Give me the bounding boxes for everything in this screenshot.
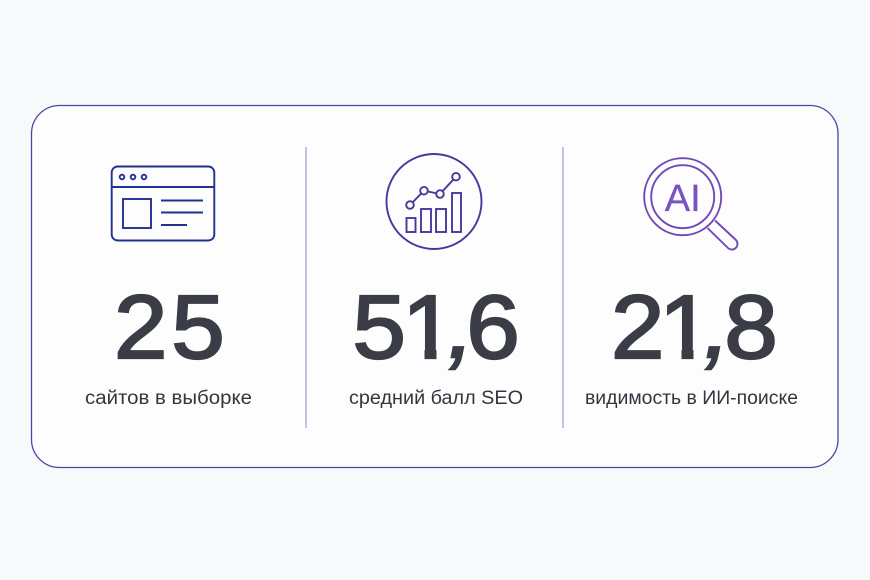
stat: SEO score number: 6 (466, 277, 520, 377)
label: sites: сайтов в выборке (85, 388, 252, 409)
icon: AI magnifier: AI (665, 178, 701, 220)
stat: AI visibility number: 8 (724, 277, 778, 377)
label: SEO: средний балл SEO (349, 388, 523, 409)
stat: AI visibility number (611, 277, 778, 377)
icon: growth chart in circle (386, 154, 482, 249)
stat: SEO score number (353, 277, 520, 377)
stat: AI visibility number: , (704, 287, 727, 375)
stat: SEO score number: , (448, 287, 471, 375)
label: AI visibility: видимость в ИИ-поиске (585, 388, 798, 409)
stat: sites number: 25 (114, 277, 225, 377)
icon: browser window (112, 166, 214, 240)
stat: AI visibility number: 21 (611, 277, 712, 377)
stat: SEO score number: 51 (353, 277, 455, 377)
icon: AI magnifier (644, 158, 737, 250)
panel: stats card (32, 106, 838, 468)
